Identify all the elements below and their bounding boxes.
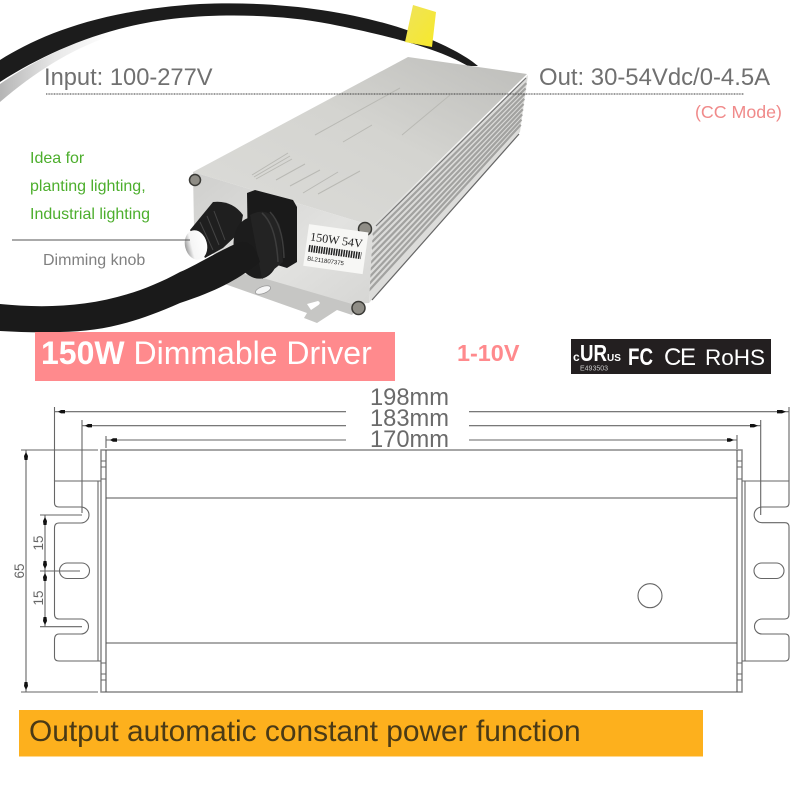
model label: 150W 54V	[309, 230, 364, 251]
dimming knob callout: Dimming knob	[43, 252, 145, 269]
width labels: 198mm	[370, 385, 449, 411]
title banner: 150W Dimmable Driver	[41, 335, 372, 371]
certification badge	[571, 339, 771, 374]
driver top face	[193, 57, 527, 226]
driver front face	[193, 172, 373, 304]
application text: Industrial lighting	[30, 206, 150, 223]
dimming knob	[182, 202, 243, 262]
certification badge: US	[607, 353, 621, 364]
certification badge: c	[573, 350, 580, 364]
yellow cable tag	[405, 5, 436, 47]
width dimension lines	[54, 407, 789, 515]
black connector block	[247, 190, 297, 268]
model label: BL211807375	[307, 256, 345, 267]
right mounting flange	[742, 481, 789, 661]
certification badge: FC	[628, 344, 653, 371]
cable shadow band	[0, 30, 110, 102]
driver printed markings	[252, 88, 450, 194]
certification badge: UR	[580, 340, 607, 366]
driver side face with ribs	[368, 75, 528, 303]
certification badge: E493503	[580, 366, 608, 372]
corner screws	[190, 174, 372, 314]
output callout: Out: 30-54Vdc/0-4.5A	[539, 64, 770, 91]
height dimension: 15	[31, 535, 46, 551]
feature banner: Output automatic constant power function	[29, 715, 581, 748]
dimension drawing	[12, 385, 789, 692]
cable gland	[228, 212, 284, 283]
rear cable	[0, 3, 478, 82]
left mounting flange	[54, 481, 101, 661]
feature banner	[19, 710, 703, 756]
dial hole	[638, 584, 662, 608]
width labels: 183mm	[370, 406, 449, 432]
application text: Idea for	[30, 150, 85, 167]
mounting flange	[222, 270, 360, 323]
certification badge: E	[680, 344, 696, 371]
certification badge: RoHS	[705, 345, 765, 370]
height dimension	[12, 450, 98, 692]
dimming range label: 1-10V	[457, 340, 520, 366]
model label	[303, 224, 368, 274]
front cable	[0, 242, 260, 332]
application text	[30, 150, 150, 223]
certification badge: C	[664, 344, 681, 371]
title banner	[35, 332, 395, 381]
width labels: 170mm	[370, 427, 449, 453]
input callout: Input: 100-277V	[44, 65, 213, 91]
width labels	[370, 385, 449, 453]
height dimension: 65	[12, 563, 27, 579]
height dimension: 15	[31, 590, 46, 606]
driver body outline	[101, 450, 742, 692]
product photo: LED driver	[0, 3, 528, 332]
CC mode note: (CC Mode)	[695, 102, 782, 122]
application text: planting lighting,	[30, 178, 146, 195]
